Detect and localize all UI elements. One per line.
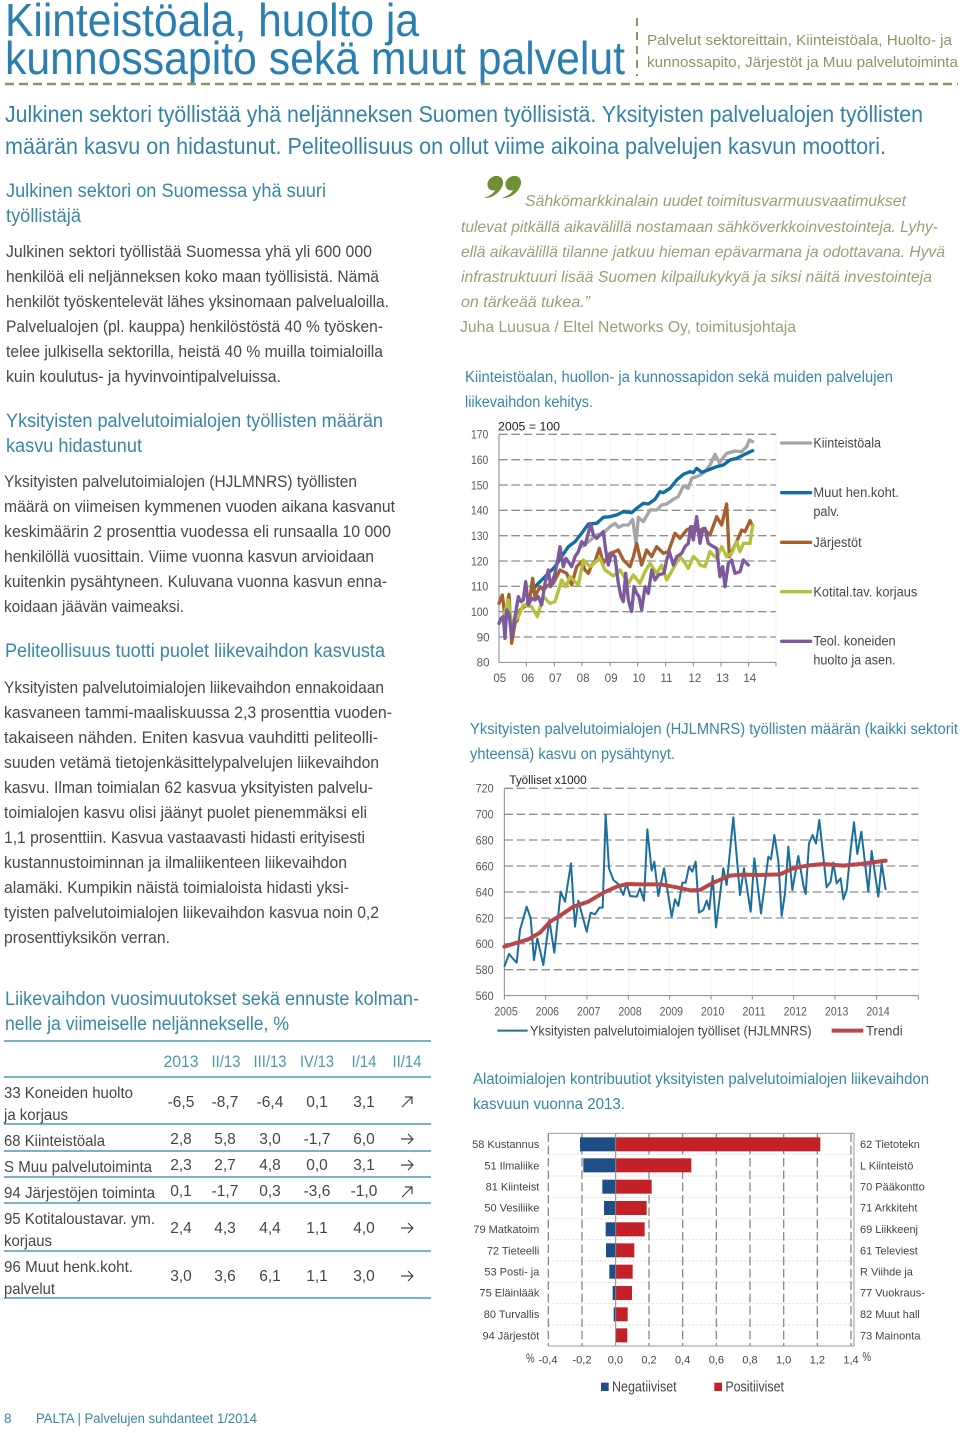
bar chart: contributions: Negatiiviset (612, 1379, 677, 1395)
line chart: turnover index: 160 (471, 454, 489, 467)
table: yearly changes: II/14 (392, 1053, 422, 1071)
text block: public sector: kuin koulutus- ja hyvinvointipalveluissa. (6, 368, 281, 386)
line chart: turnover index: palv. (813, 504, 839, 519)
bar chart: contributions: Positiiviset (725, 1379, 784, 1395)
table: yearly changes: -1,7 (304, 1131, 330, 1148)
line chart: employment: 700 (476, 809, 494, 822)
line chart: turnover index (471, 420, 917, 685)
table: yearly changes: 3,0 (353, 1268, 375, 1285)
line chart: employment: 2005 (494, 1005, 518, 1018)
table: yearly changes: 1,1 (306, 1220, 328, 1237)
bar chart: contributions: % (526, 1350, 535, 1365)
table: yearly changes: 4,3 (214, 1220, 236, 1237)
bar chart: contributions: 75 Eläinlääk (479, 1288, 540, 1300)
quote: ellä aikavälillä tilanne jatkuu hieman epävarmana ja odottavana. Hyvä (461, 244, 945, 261)
table: yearly changes: 95 Kotitaloustavar. ym. (4, 1211, 155, 1228)
heading: game industry: Peliteollisuus tuotti puolet liikevaihdon kasvusta (5, 641, 385, 662)
text block: game industry: kustannustoiminnan ja ilmaliikenteen liikevaihdon (4, 854, 347, 872)
bar chart: contributions: 82 Muut hall (860, 1309, 920, 1321)
text block: private services: henkilöllä vuosittain. Viime vuonna kasvun arvioidaan (4, 548, 374, 566)
line chart: turnover index: 170 (471, 429, 489, 442)
table: yearly changes: ja korjaus (3, 1107, 68, 1124)
table: yearly changes: 5,8 (214, 1131, 236, 1148)
bar chart: contributions: 1,4 (843, 1354, 859, 1366)
line chart: turnover index: 14 (743, 672, 757, 685)
table: yearly changes: II/13 (212, 1053, 240, 1071)
quote: Juha Luusua / Eltel Networks Oy, toimitusjohtaja (460, 319, 796, 336)
table: yearly changes: 68 Kiinteistöala (4, 1133, 105, 1150)
line chart: turnover index: huolto ja asen. (813, 652, 896, 667)
table: yearly changes: 6,0 (353, 1131, 375, 1148)
line chart: turnover index: 140 (471, 505, 489, 518)
bar chart: contributions: 72 Tieteelli (487, 1245, 539, 1257)
line chart: turnover index: Kiinteistöala (813, 435, 881, 450)
table: yearly changes: I/14 (352, 1053, 376, 1071)
bar chart: contributions: 0,4 (675, 1354, 690, 1366)
bar chart: contributions: 53 Posti- ja (484, 1267, 540, 1279)
line chart: employment: 2011 (742, 1005, 766, 1018)
text block: game industry: kasvu. Ilman toimialan 62 kasvua yksityisten palvelu- (4, 779, 373, 797)
line chart: employment: 2008 (618, 1005, 642, 1018)
chart title: turnover development: Kiinteistöalan, huollon- ja kunnossapidon sekä muiden palvelujen (465, 369, 893, 386)
line chart: employment: 720 (476, 783, 494, 796)
bar chart: contributions: 70 Pääkontto (860, 1181, 925, 1193)
heading: private services: kasvu hidastunut (6, 436, 143, 457)
chart title: contributions (473, 1071, 929, 1113)
quote: Sähkömarkkinalain uudet toimitusvarmuusvaatimukset (525, 193, 907, 210)
text block: game industry: toimialojen kasvu olisi jäänyt puolet pienemmäksi eli (4, 804, 367, 822)
table: yearly changes (3, 1041, 431, 1298)
table: yearly changes: 2,3 (170, 1157, 192, 1174)
table: yearly changes: 2,8 (170, 1131, 192, 1148)
table: yearly changes: 4,0 (353, 1220, 375, 1237)
bar chart: contributions: 80 Turvallis (484, 1309, 540, 1321)
line chart: employment: 660 (476, 860, 494, 873)
line chart: turnover index: Teol. koneiden (813, 634, 896, 649)
bar chart: contributions: L Kiinteistö (860, 1160, 913, 1172)
bar chart: contributions: 81 Kiinteist (486, 1181, 539, 1193)
text block: public sector: Palvelualojen (pl. kauppa) henkilöstöstä 40 % työsken- (6, 318, 383, 336)
table: yearly changes: 0,1 (306, 1094, 328, 1111)
line chart: turnover index: 130 (471, 530, 489, 543)
table: yearly changes: korjaus (4, 1233, 52, 1250)
section subtitle: Palvelut sektoreittain, Kiinteistöala, Huolto- ja (647, 32, 953, 49)
line chart: turnover index: 05 (493, 672, 506, 685)
bar chart: contributions: 51 Ilmaliike (484, 1160, 539, 1172)
table: yearly changes: 3,1 (353, 1157, 375, 1174)
text block: game industry: 1,1 prosenttiin. Kasvua vastaavasti hidasti erityisesti (4, 829, 365, 847)
bar chart: contributions: 0,2 (641, 1354, 657, 1366)
chart title: turnover development: liikevaihdon kehitys. (465, 394, 593, 411)
line chart: turnover index: 13 (716, 672, 729, 685)
line chart: employment: 2013 (825, 1005, 848, 1018)
bar chart: contributions: 1,0 (776, 1354, 791, 1366)
line chart: employment: 600 (476, 938, 494, 951)
bar chart: contributions: 73 Mainonta (860, 1330, 921, 1342)
table: yearly changes: 4,8 (259, 1157, 281, 1174)
text block: private services: kuitenkin pysähtyneen. Kuluvana vuonna kasvun enna- (4, 573, 387, 591)
table: yearly changes: III/13 (254, 1053, 286, 1071)
table: yearly changes: -1,0 (351, 1183, 378, 1200)
section subtitle (647, 32, 959, 71)
line chart: turnover index: 09 (605, 672, 618, 685)
table: yearly changes: 3,0 (259, 1131, 281, 1148)
bar chart: contributions: 50 Vesiliike (484, 1203, 539, 1215)
text block: public sector: Julkinen sektori työllistää Suomessa yhä yli 600 000 (6, 243, 372, 261)
table: yearly changes: 0,3 (259, 1183, 281, 1200)
text block: private services: Yksityisten palvelutoimialojen (HJLMNRS) työllisten (4, 473, 357, 491)
bar chart: contributions (472, 1133, 925, 1395)
table: yearly changes: -8,7 (212, 1094, 238, 1111)
table: yearly changes: 2,7 (214, 1157, 236, 1174)
table: yearly changes: 33 Koneiden huolto (4, 1085, 133, 1102)
text block: public sector: henkilöä eli neljänneksen koko maan työllisistä. Nämä (6, 268, 380, 286)
bar chart: contributions: -0,4 (539, 1354, 557, 1366)
chart title: contributions: kasvuun vuonna 2013. (473, 1096, 625, 1113)
table: yearly changes: 96 Muut henk.koht. (4, 1259, 133, 1276)
icon: quotation marks (484, 176, 521, 198)
line chart: employment: 560 (476, 990, 494, 1003)
text block: game industry (4, 679, 392, 947)
table: yearly changes: 0,0 (306, 1157, 328, 1174)
quote: on tärkeää tukea.” (461, 294, 591, 311)
bar chart: contributions: -0,2 (573, 1354, 591, 1366)
line chart: employment: 2014 (866, 1005, 890, 1018)
text block: private services (4, 473, 395, 616)
bar chart: contributions: 71 Arkkiteht (860, 1203, 917, 1215)
line chart: employment: Yksityisten palvelutoimialojen työlliset (HJLMNRS) (530, 1023, 812, 1038)
line chart: employment: Trendi (866, 1023, 903, 1038)
line chart: turnover index: Järjestöt (813, 535, 862, 550)
line chart: turnover index: 150 (471, 479, 489, 492)
table: yearly changes: 2,4 (170, 1220, 192, 1237)
line chart: employment: 2010 (701, 1005, 725, 1018)
chart title: employment (470, 721, 959, 763)
table: yearly changes: 3,6 (214, 1268, 236, 1285)
heading: table: Liikevaihdon vuosimuutokset sekä ennuste kolman- (5, 989, 419, 1010)
table: yearly changes: 94 Järjestöjen toiminta (4, 1185, 155, 1202)
text block: game industry: takaiseen nähden. Eniten kasvua vauhditti peliteolli- (4, 729, 378, 747)
text block: game industry: Yksityisten palvelutoimialojen liikevaihdon ennakoidaan (4, 679, 384, 697)
line chart: employment: 580 (476, 964, 494, 977)
heading: private services: Yksityisten palvelutoimialojen työllisten määrän (6, 411, 383, 432)
bar chart: contributions: 1,2 (810, 1354, 825, 1366)
bar chart: contributions: 61 Televiest (860, 1245, 918, 1257)
line chart: turnover index: 2005 = 100 (498, 420, 560, 434)
line chart: employment: 2012 (784, 1005, 807, 1018)
heading: public sector: työllistäjä (6, 206, 81, 227)
line chart: employment: 2006 (536, 1005, 559, 1018)
bar chart: contributions: 69 Liikkeenj (860, 1224, 918, 1236)
line chart: employment: Työlliset x1000 (509, 773, 587, 787)
line chart: turnover index: 90 (477, 631, 490, 644)
text block: game industry: alamäki. Kumpikin näistä toimialoista hidasti yksi- (4, 879, 349, 897)
table: yearly changes: -3,6 (304, 1183, 330, 1200)
table: yearly changes: 2013 (164, 1053, 198, 1071)
title: kunnossapito sekä muut palvelut (5, 32, 625, 84)
table: yearly changes: S Muu palvelutoiminta (4, 1159, 152, 1176)
line chart: turnover index: Muut hen.koht. (813, 485, 899, 500)
line chart: turnover index: 12 (688, 672, 701, 685)
chart title: turnover development (465, 369, 893, 411)
text block: game industry: suuden vetämä tietojenkäsittelypalvelujen liikevaihdon (4, 754, 379, 772)
line chart: turnover index: 10 (632, 672, 646, 685)
line chart: turnover index: 110 (471, 581, 489, 594)
chart title: contributions: Alatoimialojen kontribuutiot yksityisten palvelutoimialojen liikevaihdon (473, 1071, 929, 1088)
text block: public sector: henkilöt työskentelevät lähes yksinomaan palvelualoilla. (6, 293, 389, 311)
text block: private services: koidaan jäävän vaimeaksi. (4, 598, 184, 616)
table: yearly changes: -1,7 (212, 1183, 238, 1200)
heading: table (5, 989, 419, 1035)
bar chart: contributions: 0,8 (742, 1354, 758, 1366)
section subtitle: kunnossapito, Järjestöt ja Muu palvelutoiminta (647, 54, 959, 71)
line chart: turnover index: 80 (477, 657, 490, 670)
line chart: employment: 620 (476, 912, 494, 925)
line chart: employment: 2007 (577, 1005, 600, 1018)
line chart: turnover index: 100 (471, 606, 489, 619)
chart title: employment: yhteensä) kasvu on pysähtynyt. (470, 746, 675, 763)
line chart: turnover index: 07 (549, 672, 562, 685)
text block: game industry: tyisten palvelutoimialojen liikevaihdon kasvua noin 0,2 (4, 904, 379, 922)
intro text: määrän kasvu on hidastunut. Peliteollisuus on ollut viime aikoina palvelujen kasvun moottori. (5, 133, 886, 159)
table: yearly changes: 6,1 (259, 1268, 281, 1285)
bar chart: contributions: 94 Järjestöt (483, 1330, 539, 1342)
intro text (5, 101, 923, 159)
table: yearly changes: IV/13 (300, 1053, 334, 1071)
table: yearly changes: -6,4 (257, 1094, 284, 1111)
quote (460, 193, 945, 336)
table: yearly changes: 4,4 (259, 1220, 281, 1237)
text block: public sector (6, 243, 389, 386)
bar chart: contributions: 62 Tietotekn (860, 1139, 920, 1151)
heading: table: nelle ja viimeiselle neljännekselle, % (5, 1014, 289, 1035)
text block: game industry: prosenttiyksikön verran. (4, 929, 170, 947)
line chart: employment (476, 773, 918, 1038)
table: yearly changes: 1,1 (306, 1268, 328, 1285)
line chart: employment: 640 (476, 886, 494, 899)
line chart: employment: 2009 (660, 1005, 683, 1018)
table: yearly changes: 0,1 (170, 1183, 192, 1200)
table: yearly changes: palvelut (4, 1281, 56, 1298)
bar chart: contributions: 77 Vuokraus- (860, 1288, 925, 1300)
heading: public sector (6, 181, 326, 227)
heading: private services (6, 411, 383, 457)
footer: 8 (4, 1411, 12, 1426)
table: yearly changes: -6,5 (168, 1094, 194, 1111)
line chart: turnover index: 120 (471, 555, 489, 568)
title (5, 0, 625, 84)
text block: game industry: kasvaneen tammi-maaliskuussa 2,3 prosenttia vuoden- (4, 704, 392, 722)
quote: infrastruktuuri lisää Suomen kilpailukykyä ja siksi näitä investointeja (461, 269, 932, 286)
line chart: turnover index: 06 (521, 672, 534, 685)
line chart: turnover index: Kotital.tav. korjaus (813, 584, 917, 599)
text block: private services: määrä on viimeisen kymmenen vuoden aikana kasvanut (4, 498, 395, 516)
table: yearly changes: 3,1 (353, 1094, 375, 1111)
text block: public sector: telee julkisella sektorilla, heistä 40 % muilla toimialoilla (6, 343, 384, 361)
quote: tulevat pitkällä aikavälillä nostamaan sähköverkkoinvestointeja. Lyhy- (461, 219, 938, 236)
bar chart: contributions: 0,6 (709, 1354, 724, 1366)
footer: PALTA | Palvelujen suhdanteet 1/2014 (36, 1411, 257, 1426)
bar chart: contributions: 0,0 (608, 1354, 623, 1366)
line chart: turnover index: 08 (577, 672, 590, 685)
bar chart: contributions: 58 Kustannus (472, 1139, 540, 1151)
heading: public sector: Julkinen sektori on Suomessa yhä suuri (6, 181, 326, 202)
line chart: employment: 680 (476, 834, 494, 847)
text block: private services: keskimäärin 2 prosenttia vuodessa eli runsaalla 10 000 (4, 523, 391, 541)
bar chart: contributions: 79 Matkatoim (473, 1224, 539, 1236)
line chart: turnover index: 11 (660, 672, 672, 685)
bar chart: contributions: R Viihde ja (860, 1267, 914, 1279)
bar chart: contributions: % (862, 1349, 871, 1364)
table: yearly changes: 3,0 (170, 1268, 192, 1285)
